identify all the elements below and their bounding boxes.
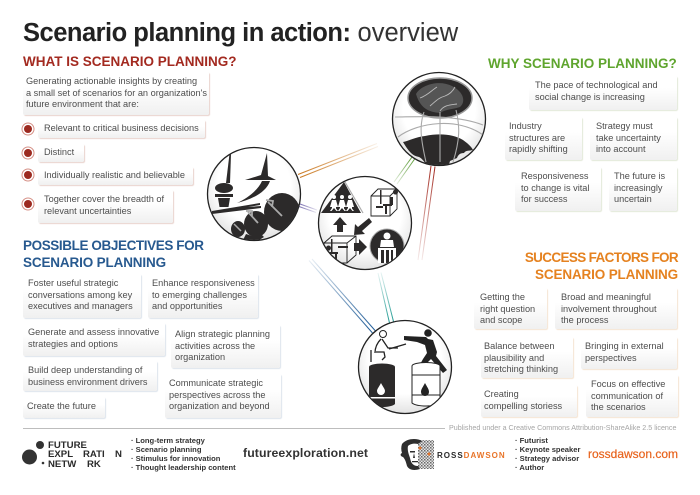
objective: foster conversations <box>23 274 141 318</box>
heading: success factors: SCENARIO PLANNING <box>535 266 678 282</box>
services list: future exploration: · Thought leadership content <box>131 463 236 472</box>
icon: circle with tower, arrows and satellite dishes <box>206 146 302 242</box>
factor: effective communication <box>586 375 678 417</box>
factor: broad involvement: the process <box>561 315 608 325</box>
objective: generate strategies <box>23 323 165 356</box>
icon: circle with people, desks and arrows <box>318 176 412 270</box>
factor: right question: right question <box>480 304 535 314</box>
panel: possible objectives <box>23 238 282 420</box>
definition text block: future environment that are: <box>26 99 139 109</box>
objective: foster conversations: Foster useful strategic <box>28 278 118 288</box>
factor: external perspectives: perspectives <box>585 353 637 363</box>
factor: broad involvement: Broad and meaningful <box>561 292 651 302</box>
services list: ross dawson: · Author <box>515 463 544 472</box>
heading: why scenario planning: WHY SCENARIO PLANNING? <box>488 56 677 71</box>
logo wordmark: RK <box>87 459 101 470</box>
factor: right question <box>474 288 547 329</box>
services list: ross dawson: · Keynote speaker <box>515 445 580 454</box>
logo: ross dawson <box>400 439 506 470</box>
objective: communicate perspectives: Communicate strategic <box>169 378 263 388</box>
factor: external perspectives: Bringing in external <box>585 341 664 351</box>
reason: strategy uncertainty <box>590 117 677 160</box>
icon: circle with brain over globe <box>392 72 486 166</box>
services list: future exploration: · Scenario planning <box>131 445 201 454</box>
factor: compelling stories <box>481 385 577 417</box>
objective: enhance responsiveness <box>148 274 258 318</box>
objective: foster conversations: conversations among key <box>28 290 132 300</box>
factor: balance: Balance between <box>484 341 554 351</box>
item: realistic <box>38 167 193 185</box>
reason: industry structures: Industry <box>509 121 542 131</box>
logo wordmark: RATI <box>83 449 105 460</box>
item: realistic: Individually realistic and believable <box>44 170 185 180</box>
bullet: relevant <box>24 125 32 133</box>
definition text block: Generating actionable insights by creating <box>26 76 197 86</box>
heading: possible objectives <box>23 238 204 270</box>
objective: align activities: organization <box>175 352 225 362</box>
item: distinct <box>38 144 84 162</box>
reason: uncertain future: uncertain <box>614 194 652 204</box>
factor: right question: Getting the <box>480 292 525 302</box>
logo wordmark: FUTURE <box>48 440 87 451</box>
services list: future exploration <box>131 436 236 472</box>
services list: future exploration: · Long-term strategy <box>131 436 205 445</box>
objective: create the future <box>23 397 105 418</box>
objective: enhance responsiveness: and opportunities <box>152 301 222 311</box>
objective: communicate perspectives: organization and beyond <box>169 401 270 411</box>
objective: build understanding <box>23 361 157 391</box>
reason: industry structures: structures are <box>509 133 565 143</box>
reason: strategy uncertainty: Strategy must <box>596 121 653 131</box>
objective: create the future: Create the future <box>27 401 96 411</box>
reason: responsiveness <box>515 167 601 211</box>
objective: generate strategies: strategies and options <box>28 339 118 349</box>
objective: communicate perspectives: perspectives across the <box>169 390 266 400</box>
objective: build understanding: Build deep understanding of <box>28 365 142 375</box>
services list: future exploration: · Stimulus for innovation <box>131 454 220 463</box>
factor: balance: stretching thinking <box>484 364 558 374</box>
website: rossdawson.com: rossdawson.com <box>588 447 678 461</box>
reason: responsiveness: Responsiveness <box>521 171 588 181</box>
item: relevant: Relevant to critical business decisions <box>44 123 199 133</box>
reason: pace of change: social change is increasing <box>535 92 645 102</box>
wordmark: ROSSDAWSON <box>437 451 506 460</box>
logo wordmark: EXPL <box>48 449 73 460</box>
objective: align activities: Align strategic planning <box>175 329 270 339</box>
panel: what is scenario planning <box>22 54 236 224</box>
objective: enhance responsiveness: to emerging challenges <box>152 290 247 300</box>
definition text block <box>23 72 209 115</box>
objective: communicate perspectives <box>165 374 281 418</box>
factor: balance <box>481 337 573 378</box>
reason: strategy uncertainty: take uncertainty <box>596 133 661 143</box>
factor: broad involvement: involvement throughout <box>561 304 657 314</box>
panel: why scenario planning <box>488 56 678 212</box>
heading: possible objectives: POSSIBLE OBJECTIVES FOR <box>23 238 204 253</box>
factor: balance: plausibility and <box>484 353 544 363</box>
item: distinct: Distinct <box>44 147 74 157</box>
heading: possible objectives: SCENARIO PLANNING <box>23 254 166 270</box>
reason: pace of change: The pace of technological and <box>535 80 658 90</box>
reason: uncertain future <box>609 167 677 211</box>
objective: generate strategies: Generate and assess innovative <box>28 327 159 337</box>
reason: pace of change <box>529 76 677 110</box>
factor: effective communication: the scenarios <box>591 402 646 412</box>
logo wordmark: NETW <box>48 459 76 470</box>
factor: effective communication: communication of <box>591 391 663 401</box>
factor: compelling stories: Creating <box>484 389 519 399</box>
reason: responsiveness: for success <box>521 194 567 204</box>
factor: right question: and scope <box>480 315 522 325</box>
objective: build understanding: business environment drivers <box>28 377 148 387</box>
item: breadth: relevant uncertainties <box>44 206 131 216</box>
bullet: realistic <box>24 171 32 179</box>
website: futureexploration.net: futureexploration.net <box>243 446 368 460</box>
heading: success factors: SUCCESS FACTORS FOR <box>525 250 678 265</box>
objective: align activities <box>171 325 280 368</box>
portrait mark <box>400 439 434 470</box>
reason: uncertain future: The future is <box>614 171 665 181</box>
services list: ross dawson: · Futurist <box>515 436 548 445</box>
factor: effective communication: Focus on effective <box>591 379 665 389</box>
factor: external perspectives <box>581 337 677 369</box>
reason: uncertain future: increasingly <box>614 183 663 193</box>
heading: success factors <box>525 250 678 282</box>
reason: industry structures <box>505 117 582 160</box>
bullet: distinct <box>24 149 32 157</box>
services list: ross dawson: · Strategy advisor <box>515 454 579 463</box>
reason: industry structures: rapidly shifting <box>509 144 568 154</box>
definition text block: a small set of scenarios for an organization's <box>26 88 207 98</box>
licence note: Published under a Creative Commons Attribution-ShareAlike 2.5 licence <box>449 424 676 432</box>
bullet: breadth <box>24 200 32 208</box>
item: relevant <box>38 120 205 138</box>
icon: circle with figures on oil barrels <box>358 320 452 414</box>
reason: strategy uncertainty: into account <box>596 144 646 154</box>
factor: compelling stories: compelling storiess <box>484 401 562 411</box>
logo wordmark <box>48 440 122 470</box>
title: Scenario planning in action: overview <box>23 19 458 47</box>
reason: responsiveness: to change is vital <box>521 183 589 193</box>
item: breadth: Together cover the breadth of <box>44 194 164 204</box>
item: breadth <box>38 190 173 223</box>
factor: broad involvement <box>555 288 677 329</box>
objective: enhance responsiveness: Enhance responsiveness <box>152 278 255 288</box>
panel: success factors <box>474 250 680 418</box>
footer divider <box>23 428 445 429</box>
services list: ross dawson <box>515 436 580 472</box>
logo mark <box>22 441 44 464</box>
heading: what is scenario planning: WHAT IS SCENARIO PLANNING? <box>23 54 236 69</box>
logo wordmark: N <box>115 449 122 460</box>
logo: future exploration network <box>22 440 122 470</box>
objective: foster conversations: executives and managers <box>28 301 133 311</box>
objective: align activities: activities across the <box>175 341 255 351</box>
